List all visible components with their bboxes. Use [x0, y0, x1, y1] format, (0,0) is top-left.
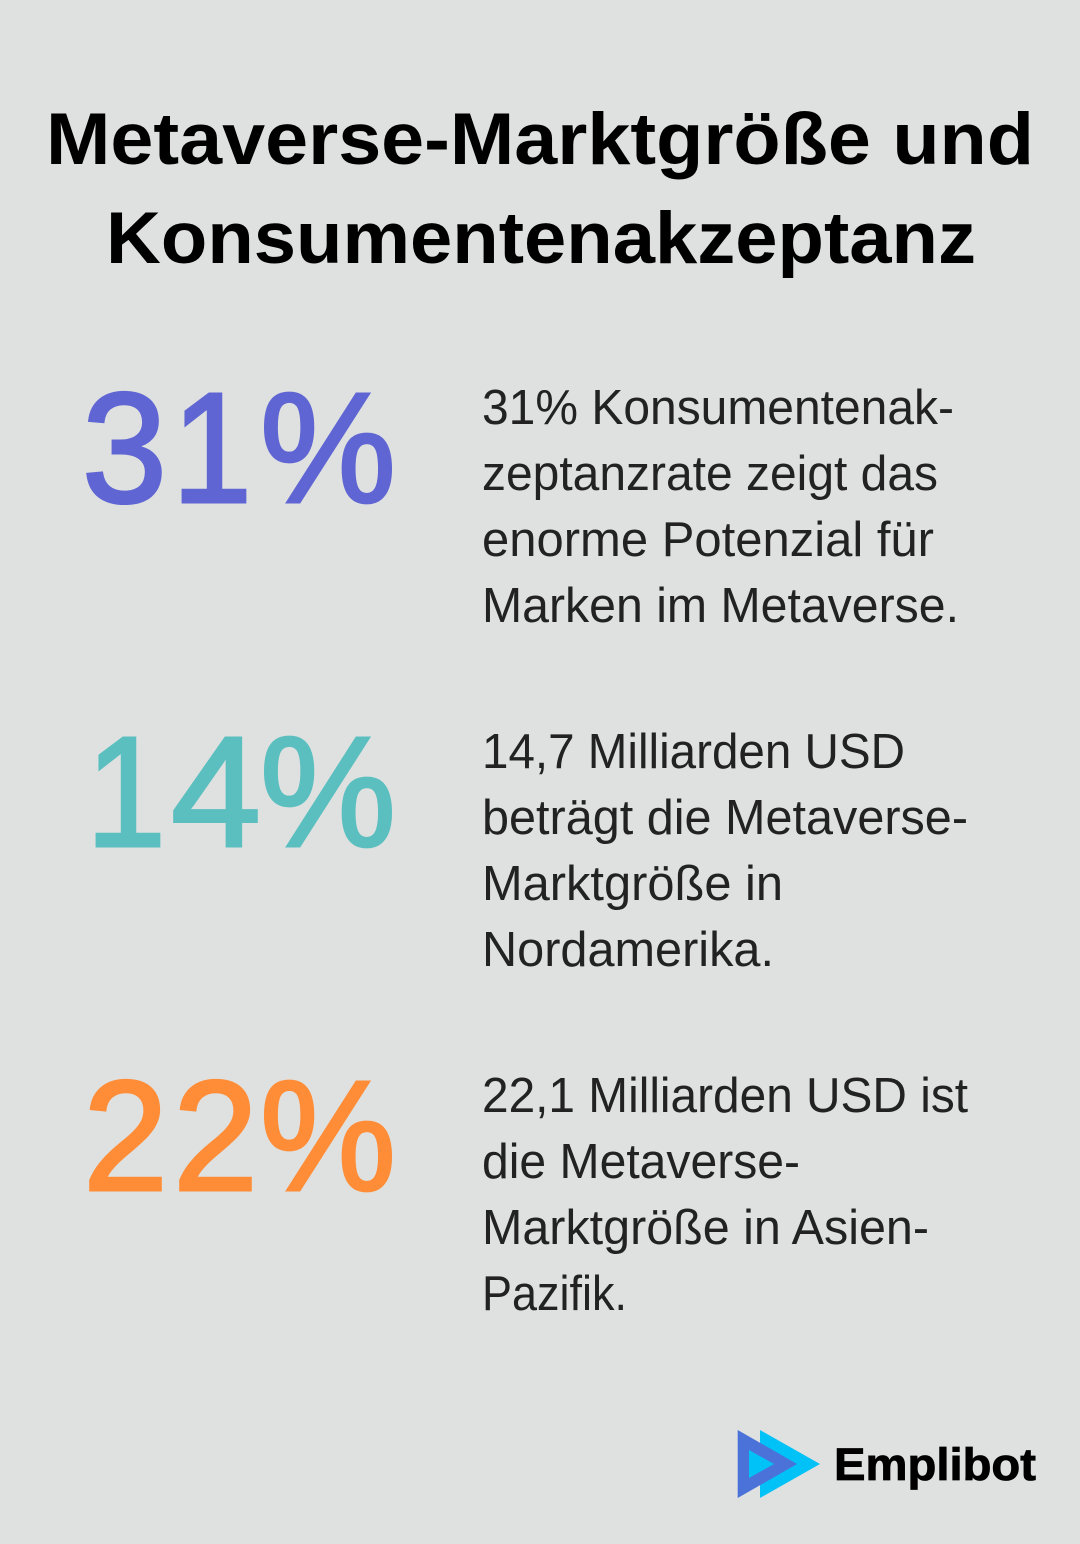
description 22%: die Metaverse- [482, 1135, 800, 1189]
big number 31%: 1 [172, 361, 252, 536]
description 22%: 22,1 Milliarden USD ist [482, 1069, 968, 1123]
big number 22%: % [260, 1049, 396, 1224]
description 31%: zeptanzrate zeigt das [482, 447, 938, 501]
description 31% [482, 381, 959, 633]
description 14%: Marktgröße in [482, 857, 783, 911]
big number 14% [86, 705, 396, 880]
description 31%: Marken im Metaverse. [482, 579, 959, 633]
big number 14%: 4 [171, 705, 261, 880]
description 22%: Marktgröße in Asien- [482, 1201, 929, 1255]
description 14% [482, 725, 968, 977]
description 31%: 31% Konsumentenak- [482, 381, 954, 435]
description 14%: 14,7 Milliarden USD [482, 725, 905, 779]
icon: play triangles [738, 1430, 820, 1498]
big number 14%: % [260, 705, 396, 880]
description 31%: enorme Potenzial für [482, 513, 934, 567]
big number 14%: 1 [86, 705, 166, 880]
description 22%: Pazifik. [482, 1267, 627, 1321]
big number 22%: 2 [173, 1049, 258, 1224]
description 22% [482, 1069, 968, 1321]
stat: 14% [86, 705, 968, 977]
stat: 31% [82, 361, 959, 633]
big number 31%: 3 [82, 361, 167, 536]
big number 22% [83, 1049, 396, 1224]
big number 31% [82, 361, 396, 536]
title: Konsumentenakzeptanz [106, 198, 976, 279]
title: Metaverse-Marktgröße und [46, 99, 1034, 180]
wordmark: Emplibot [834, 1439, 1036, 1490]
big number 31%: % [260, 361, 396, 536]
description 14%: Nordamerika. [482, 923, 774, 977]
title [46, 99, 1034, 279]
logo: Emplibot [738, 1430, 1036, 1498]
description 14%: beträgt die Metaverse- [482, 791, 968, 845]
big number 22%: 2 [83, 1049, 168, 1224]
stat: 22% [83, 1049, 968, 1321]
